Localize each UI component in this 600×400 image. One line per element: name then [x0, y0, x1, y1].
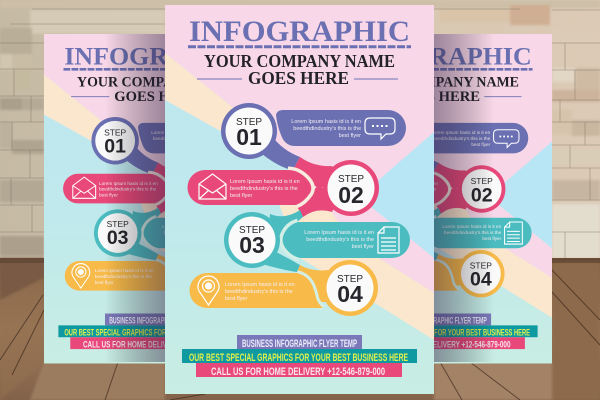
step 04: 04 [337, 281, 363, 307]
text: purple pill: Lorem Ipsum hasis id is it en [151, 130, 210, 135]
pill: pink [188, 170, 311, 205]
icon: chat bubble [213, 130, 239, 147]
text: teal pill: best flyer [352, 244, 374, 250]
heading rules [484, 96, 522, 98]
banner: pink [196, 363, 402, 378]
banner: purple: BUSINESS INFOGRAPHIC FLYER TEMP [109, 316, 207, 326]
text: teal pill: beedthdindustry's this is the [164, 230, 221, 235]
pill: pink [63, 174, 168, 203]
text: pink pill [99, 181, 158, 198]
text: orange pill [225, 282, 295, 302]
connector stems [434, 160, 466, 286]
text: orange pill: beedthdindustry's this is the [375, 274, 433, 279]
step 02: 02 [471, 185, 493, 207]
pill: purple [276, 110, 406, 146]
left back flyer [44, 34, 165, 364]
step 02: 02 [191, 185, 213, 207]
right back flyer [434, 34, 552, 364]
text: purple pill: Lorem Ipsum hasis id is it en [291, 119, 361, 125]
text: pink pill [230, 179, 300, 199]
banner: pink [350, 337, 525, 349]
text: orange pill: Lorem Ipsum hasis id is it en [375, 268, 434, 273]
banner: teal [339, 325, 538, 338]
text: purple pill: beedthdindustry's this is the [433, 136, 491, 141]
text: purple pill: beedthdindustry's this is the [153, 136, 210, 141]
goes here: GOES HERE [394, 88, 480, 105]
banner: pink: CALL US FOR HOME DELIVERY +12-546-879-000 [363, 339, 510, 349]
icon: chat bubble [494, 130, 519, 147]
step 01: 01 [104, 136, 126, 158]
step 02: STEP [338, 174, 364, 185]
text: pink pill: beedthdindustry's this is the [379, 187, 437, 192]
flyer background bands [44, 34, 165, 364]
step 02: 02 [338, 182, 364, 208]
icon: map pin [198, 276, 219, 305]
step 04: 04 [470, 269, 492, 291]
icon: envelope [353, 177, 376, 198]
text: orange pill: beedthdindustry's this is the [225, 289, 293, 295]
title: INFOGRAPHIC [64, 42, 252, 70]
pill: orange [190, 273, 323, 308]
pill: orange [65, 261, 178, 291]
banner: teal [58, 325, 165, 338]
text: orange pill: best flyer [375, 280, 394, 285]
banner: teal: OUR BEST SPECIAL GRAPHICS FOR YOUR BEST BUSINESS HERE [64, 328, 250, 338]
step 03: STEP [239, 225, 265, 236]
company name: YOUR COMPANY NAME [204, 51, 395, 71]
banner: pink [70, 337, 165, 350]
step 03 [94, 209, 141, 257]
text: purple pill: best flyer [191, 142, 210, 147]
step 04 [177, 250, 224, 297]
banner: teal [182, 349, 417, 364]
banner: purple: BUSINESS INFOGRAPHIC FLYER TEMP [389, 316, 487, 326]
step 01: STEP [236, 117, 262, 128]
text: purple pill [431, 130, 491, 147]
step 04: STEP [337, 274, 363, 285]
right flyer shadow [434, 34, 494, 362]
text: pink pill: best flyer [99, 193, 118, 198]
text: teal pill: best flyer [202, 236, 221, 241]
pill: teal [283, 222, 410, 258]
pill: orange [434, 258, 460, 292]
icon: envelope [199, 174, 226, 199]
step 04: 04 [190, 269, 212, 291]
heading rules [71, 96, 110, 98]
step 02: STEP [471, 176, 493, 186]
banner: pink: CALL US FOR HOME DELIVERY +12-546-879-000 [83, 339, 230, 349]
step 01 [221, 103, 277, 159]
step 03: 03 [239, 232, 265, 258]
step 03 [224, 212, 280, 268]
step 01: 01 [384, 136, 406, 158]
text: orange pill: best flyer [225, 296, 247, 302]
text: teal pill: Lorem Ipsum hasis id is it en [304, 230, 374, 236]
icon: document [224, 222, 242, 244]
text: teal pill [304, 230, 374, 250]
step 01: STEP [384, 128, 407, 138]
step 04: STEP [470, 261, 492, 271]
text: purple pill: Lorem Ipsum hasis id is it en [431, 130, 491, 135]
text: pink pill: beedthdindustry's this is the [230, 186, 298, 192]
pill: teal [424, 218, 532, 248]
heading rules [197, 78, 398, 80]
text: teal pill: Lorem Ipsum hasis id is it en [162, 224, 221, 229]
left flyer shadow [105, 34, 165, 362]
step 01: STEP [104, 128, 127, 138]
banner: teal: OUR BEST SPECIAL GRAPHICS FOR YOUR BEST BUSINESS HERE [189, 352, 408, 364]
step 03: STEP [107, 219, 129, 229]
banner: purple [237, 335, 362, 350]
connector stems [262, 136, 340, 302]
step 03 [374, 209, 422, 257]
text: teal pill: beedthdindustry's this is the [444, 230, 502, 235]
brick wall background [0, 0, 600, 260]
icon: map pin [72, 264, 90, 288]
connector stems [127, 148, 165, 262]
front flyer [165, 5, 434, 394]
text: pink pill: best flyer [230, 193, 252, 199]
flyer background bands [434, 34, 552, 364]
text: pink pill: Lorem Ipsum hasis id is it en [230, 179, 300, 185]
step 01 [372, 117, 419, 164]
step 01: 01 [236, 124, 262, 150]
step 03: 03 [107, 227, 129, 249]
goes here: GOES HERE [248, 68, 349, 88]
icon: document [505, 222, 522, 244]
icon: document [378, 227, 399, 253]
text: orange pill: beedthdindustry's this is the [95, 274, 152, 279]
flyer background bands [165, 5, 434, 394]
title dashes [64, 68, 165, 71]
text: orange pill: Lorem Ipsum hasis id is it en [95, 268, 154, 273]
title: INFOGRAPHIC [344, 42, 532, 70]
pill: purple [138, 122, 165, 154]
text: pink pill: best flyer [379, 193, 398, 198]
title dashes [188, 45, 411, 48]
step 01 [91, 117, 139, 164]
step 02 [458, 165, 505, 213]
text: orange pill [95, 268, 154, 285]
pill: teal [141, 215, 165, 251]
text: pink pill: beedthdindustry's this is the [99, 187, 157, 192]
step 04 [457, 250, 505, 297]
wood floor background [0, 258, 600, 400]
pill: pink [434, 172, 451, 206]
icon: chat bubble [365, 118, 395, 139]
text: purple pill [291, 119, 361, 139]
text: teal pill: Lorem Ipsum hasis id is it en [442, 224, 502, 229]
text: pink pill: Lorem Ipsum hasis id is it en [379, 181, 438, 186]
title dashes [434, 68, 532, 71]
text: purple pill: beedthdindustry's this is the [293, 126, 361, 132]
text: purple pill [152, 131, 165, 140]
step 04 [322, 260, 378, 316]
banner: purple [385, 314, 491, 326]
step 02 [178, 165, 225, 213]
text: purple pill: best flyer [339, 133, 361, 139]
banner: purple: BUSINESS INFOGRAPHIC FLYER TEMP [242, 338, 357, 350]
step 04: STEP [190, 261, 212, 271]
title: INFOGRAPHIC [189, 15, 410, 48]
company name: YOUR COMPANY NAME [77, 74, 239, 91]
step 02: STEP [190, 176, 213, 186]
company name: YOUR COMPANY NAME [357, 74, 519, 91]
step 03: 03 [387, 227, 409, 249]
banner: pink: CALL US FOR HOME DELIVERY +12-546-879-000 [211, 366, 385, 378]
icon: envelope [73, 177, 96, 198]
step 03: STEP [387, 219, 409, 229]
text: orange pill: best flyer [95, 280, 114, 285]
text: orange pill: Lorem Ipsum hasis id is it en [225, 282, 295, 288]
banner: purple [105, 314, 165, 326]
step 02 [323, 160, 379, 216]
text: teal pill [162, 225, 165, 234]
text: pink pill: Lorem Ipsum hasis id is it en [99, 181, 158, 186]
goes here: GOES HERE [114, 88, 200, 105]
pill: purple [434, 122, 528, 154]
text: teal pill: beedthdindustry's this is the [306, 237, 374, 243]
text: purple pill: best flyer [471, 142, 491, 147]
text: teal pill [442, 224, 502, 241]
text: orange pill [375, 268, 434, 285]
text: teal pill: best flyer [482, 236, 502, 241]
text: pink pill [379, 181, 438, 198]
icon: map pin [352, 264, 370, 288]
